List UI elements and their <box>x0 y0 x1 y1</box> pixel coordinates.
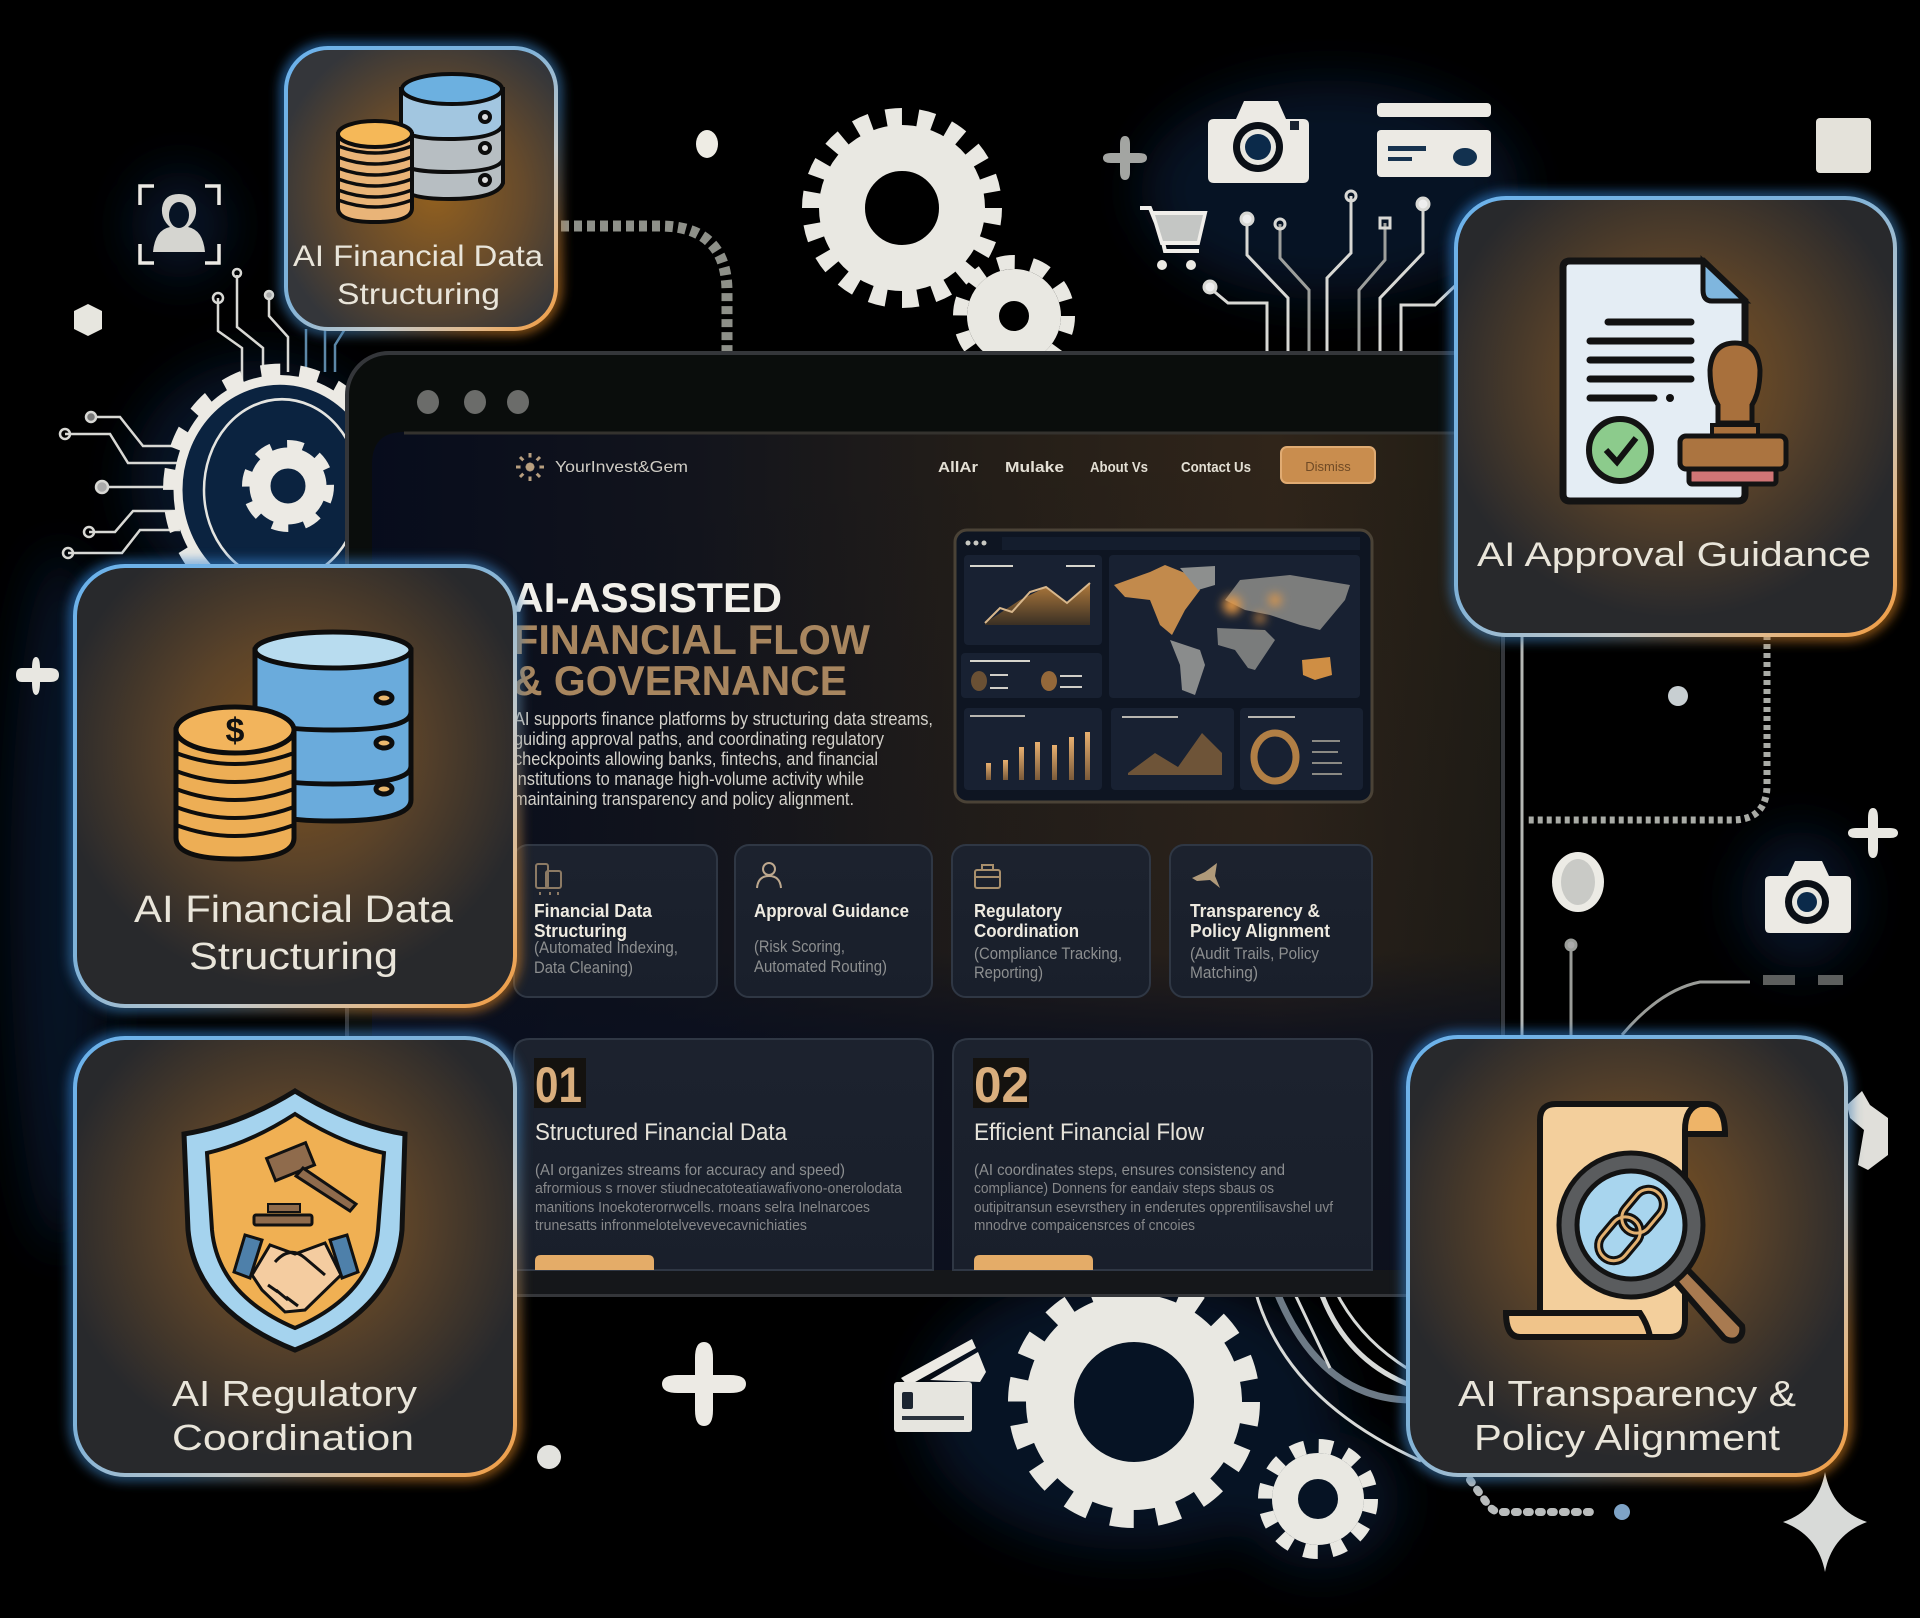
window controls <box>417 390 529 414</box>
circuits: top right <box>1204 191 1456 352</box>
label <box>1458 1373 1796 1458</box>
icon: shopping cart <box>1140 208 1205 270</box>
benefit card 02: Efficient Financial Flow <box>974 1119 1205 1146</box>
hero description: guiding approval paths, and coordinating regulatory <box>514 729 884 749</box>
dot: top <box>696 130 718 158</box>
feature card: Transparency & Policy Alignment: Transparency & <box>1190 901 1320 921</box>
icon: dollar sign: $ <box>226 712 245 750</box>
hero title: AI-ASSISTED <box>513 574 782 621</box>
benefit card 02: mnodrve compaicensrces of cncoies <box>974 1217 1195 1234</box>
dashboard dots <box>966 540 986 546</box>
button bar 02 <box>974 1255 1093 1270</box>
line chart panel <box>964 555 1102 645</box>
hero title: FINANCIAL FLOW <box>513 616 870 663</box>
gear: bottom small <box>1265 1446 1371 1552</box>
hero title <box>513 574 870 704</box>
feature card: Regulatory Coordination: Coordination <box>974 921 1079 941</box>
feature card: Financial Data Structuring: Data Cleaning) <box>534 958 633 977</box>
icon: fragment right of transparency panel <box>1847 1091 1888 1170</box>
feature card: Regulatory Coordination: (Compliance Tracking, <box>974 944 1122 963</box>
connector: dashed link top <box>561 226 727 352</box>
feature card: Approval Guidance: (Risk Scoring, <box>754 937 845 956</box>
hero title: & GOVERNANCE <box>513 657 847 704</box>
hero description: AI supports finance platforms by structuring data streams, <box>514 709 933 729</box>
navigation <box>938 447 1375 483</box>
gear: left inner small <box>247 445 329 527</box>
feature card: Approval Guidance: Approval Guidance <box>754 901 909 921</box>
icon: camera top <box>1208 101 1309 183</box>
icon: face recognition <box>140 186 219 263</box>
icon: plus left <box>16 657 59 695</box>
label <box>293 240 543 311</box>
number 01: 01 <box>535 1057 582 1113</box>
chain link <box>1593 1183 1669 1267</box>
peak chart panel <box>1111 708 1234 790</box>
panel: AI Financial Data Structuring large <box>75 566 515 1006</box>
label: AI Financial Data <box>134 889 454 931</box>
label: AI Financial Data <box>293 240 543 273</box>
label: Coordination <box>172 1417 414 1458</box>
benefit card 01: afrormious s rnover stiudnecatoteatiawafivono-onerolodata <box>535 1180 903 1197</box>
icon: scissors <box>1192 863 1220 888</box>
hero description <box>514 709 933 809</box>
icon: plus top <box>1103 136 1147 180</box>
navigation: Mulake <box>1005 459 1064 476</box>
icon: credit card top <box>1377 103 1491 177</box>
gear: left ring gear <box>170 371 390 609</box>
nav button <box>1281 447 1375 483</box>
benefit card 01: Structured Financial Data <box>535 1119 788 1146</box>
icon: person <box>757 863 781 888</box>
connectors: curved cables <box>1255 1290 1421 1461</box>
number 02: 02 <box>974 1057 1029 1113</box>
navigation: AllAr <box>938 459 978 476</box>
connector: vertical link <box>1520 630 1524 1040</box>
nav button: Dismiss <box>1305 459 1351 474</box>
benefit card 02 <box>953 1039 1372 1270</box>
feature card: Transparency & Policy Alignment: Matching) <box>1190 963 1258 982</box>
donut panel <box>1240 708 1363 790</box>
feature card: Regulatory Coordination <box>952 845 1150 997</box>
gear: top small <box>960 262 1068 370</box>
dot: bottom <box>537 1445 561 1469</box>
site logo <box>516 453 688 481</box>
label: Structuring <box>337 278 500 311</box>
bar chart panel <box>964 708 1102 790</box>
icon: four point star <box>1783 1472 1867 1572</box>
icon: document with stamp <box>1563 261 1786 501</box>
feature card: Transparency & Policy Alignment <box>1170 845 1372 997</box>
icon: database and coins <box>176 632 411 859</box>
icon: briefcase <box>975 865 1000 888</box>
site logo: YourInvest&Gem <box>555 459 688 476</box>
label: Structuring <box>189 936 398 978</box>
feature card: Transparency & Policy Alignment: (Audit Trails, Policy <box>1190 944 1319 963</box>
feature card: Approval Guidance <box>735 845 932 997</box>
benefit card 01: (AI organizes streams for accuracy and speed) <box>535 1162 845 1179</box>
benefit card 02: (AI coordinates steps, ensures consistency and <box>974 1162 1285 1179</box>
navigation: About Vs <box>1090 459 1148 476</box>
label <box>172 1373 417 1458</box>
label <box>134 889 454 978</box>
gear: bottom large <box>1018 1286 1250 1518</box>
panel: AI Financial Data Structuring small <box>286 48 556 329</box>
panel: browser window <box>347 353 1503 1295</box>
feature card: Approval Guidance: Automated Routing) <box>754 957 887 976</box>
icon: camera right <box>1765 861 1851 933</box>
feature card: Financial Data Structuring: Financial Data <box>534 901 653 921</box>
gavel <box>254 1143 356 1225</box>
connector: left panels link <box>346 1006 348 1038</box>
icon: database and coins <box>338 74 503 222</box>
feature card: Regulatory Coordination: Regulatory <box>974 901 1062 921</box>
panel: AI Transparency & Policy Alignment <box>1408 1037 1846 1475</box>
navigation: Contact Us <box>1181 459 1251 476</box>
icon: plus right <box>1848 808 1898 858</box>
button bar 01 <box>535 1255 654 1270</box>
dashboard mockup <box>955 530 1372 802</box>
circuits: left <box>60 269 345 558</box>
benefit card 01: trunesatts infronmelotelvevevecavnichiaties <box>535 1217 807 1234</box>
panel: AI Regulatory Coordination <box>75 1038 515 1475</box>
handshake <box>234 1235 358 1312</box>
hero description: institutions to manage high-volume activity while <box>514 769 864 789</box>
label: AI Approval Guidance <box>1477 536 1871 574</box>
icon: credit card bottom <box>894 1339 986 1432</box>
bottom bezel <box>350 1270 1500 1294</box>
hero description: maintaining transparency and policy alignment. <box>514 789 854 809</box>
metric panel <box>961 653 1102 698</box>
feature card: Financial Data Structuring: Structuring <box>534 921 627 941</box>
benefit card 01: manitions Inoekoterorrwcells. rnoans selra Inelnarcoes <box>535 1199 870 1216</box>
benefit card 01 <box>514 1039 933 1270</box>
hero description: checkpoints allowing banks, fintechs, and financial <box>514 749 878 769</box>
feature card: Regulatory Coordination: Reporting) <box>974 963 1043 982</box>
dot: left hexagon <box>74 304 102 336</box>
connector: dashed link right <box>1525 635 1767 820</box>
icon: scroll with magnifier <box>1506 1104 1742 1341</box>
label: AI Transparency & <box>1458 1373 1796 1414</box>
gear: top large <box>812 118 992 298</box>
feature card: Financial Data Structuring <box>514 845 717 997</box>
icon: square top right <box>1816 118 1871 173</box>
dot: right large <box>1552 852 1604 912</box>
benefit card 02: compliance) Donnens for eandaiv steps sbaus os <box>974 1180 1274 1197</box>
world map panel <box>1109 555 1360 698</box>
page background <box>372 432 1500 1270</box>
label: AI Regulatory <box>172 1373 417 1414</box>
icon: shield with gavel and handshake <box>184 1091 405 1350</box>
icon: plus bottom <box>662 1342 746 1426</box>
circuit: right node <box>1566 940 1843 1040</box>
icon: dotted trail <box>1470 1480 1630 1520</box>
feature card: Transparency & Policy Alignment: Policy Alignment <box>1190 921 1330 941</box>
icon: data <box>536 864 561 895</box>
panel: AI Approval Guidance <box>1456 198 1895 635</box>
benefit card 02: outipitransun esevrsthery in enderutes opprentilisavshel uvf <box>974 1199 1334 1216</box>
feature card: Financial Data Structuring: (Automated Indexing, <box>534 938 678 957</box>
dashboard top bar <box>1002 537 1360 550</box>
label: Policy Alignment <box>1474 1417 1780 1458</box>
dot: right small <box>1668 686 1688 706</box>
